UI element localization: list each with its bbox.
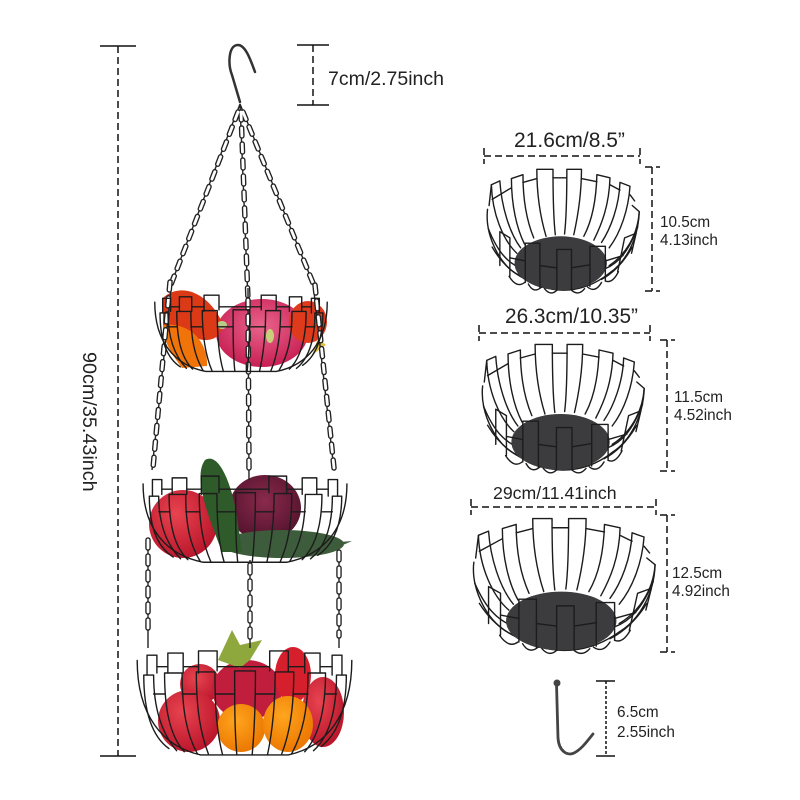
medium basket detail	[479, 305, 732, 473]
label: large width: 29cm/11.41inch	[493, 483, 617, 503]
label: small height: 10.5cm	[660, 214, 710, 231]
fruit: middle basket	[149, 459, 352, 558]
icon: S hook	[554, 680, 593, 754]
label: medium width: 26.3cm/10.35”	[505, 305, 638, 328]
label: large height: 12.5cm	[672, 565, 722, 582]
hook detail	[554, 680, 675, 756]
label: small height: 4.13inch	[660, 232, 718, 249]
label: medium height: 4.52inch	[674, 407, 732, 424]
basket: small	[487, 169, 639, 293]
label: total height: 90cm/35.43inch	[78, 352, 100, 492]
dimension: hook height	[297, 45, 444, 105]
basket: large	[473, 519, 655, 653]
dimension: small height	[645, 167, 660, 291]
dimension: small width	[484, 148, 640, 164]
label: hook detail height: 2.55inch	[617, 724, 675, 741]
hook: top	[230, 45, 255, 102]
dimension: large width	[471, 499, 656, 515]
small basket detail	[484, 129, 718, 293]
fruit: top basket	[163, 290, 327, 368]
chains: top section	[170, 104, 313, 300]
label: medium height: 11.5cm	[674, 389, 723, 406]
dimension: total height	[78, 46, 136, 756]
dimension: medium width	[479, 325, 650, 341]
hanging three tier basket	[137, 45, 352, 755]
large basket detail	[471, 483, 730, 653]
fruit: bottom basket	[158, 630, 344, 752]
basket: top tier	[155, 295, 327, 371]
label: small width: 21.6cm/8.5”	[514, 129, 625, 152]
basket: middle tier	[143, 476, 347, 562]
label: hook detail height: 6.5cm	[617, 704, 659, 721]
label: hook height: 7cm/2.75inch	[328, 68, 444, 90]
dimension: hook detail height	[596, 681, 615, 756]
basket: bottom tier	[137, 651, 352, 755]
chains: lower sections	[148, 280, 339, 648]
dimension: medium height	[660, 340, 675, 471]
dimension: large height	[660, 515, 675, 652]
label: large height: 4.92inch	[672, 583, 730, 600]
basket: medium	[482, 344, 644, 473]
